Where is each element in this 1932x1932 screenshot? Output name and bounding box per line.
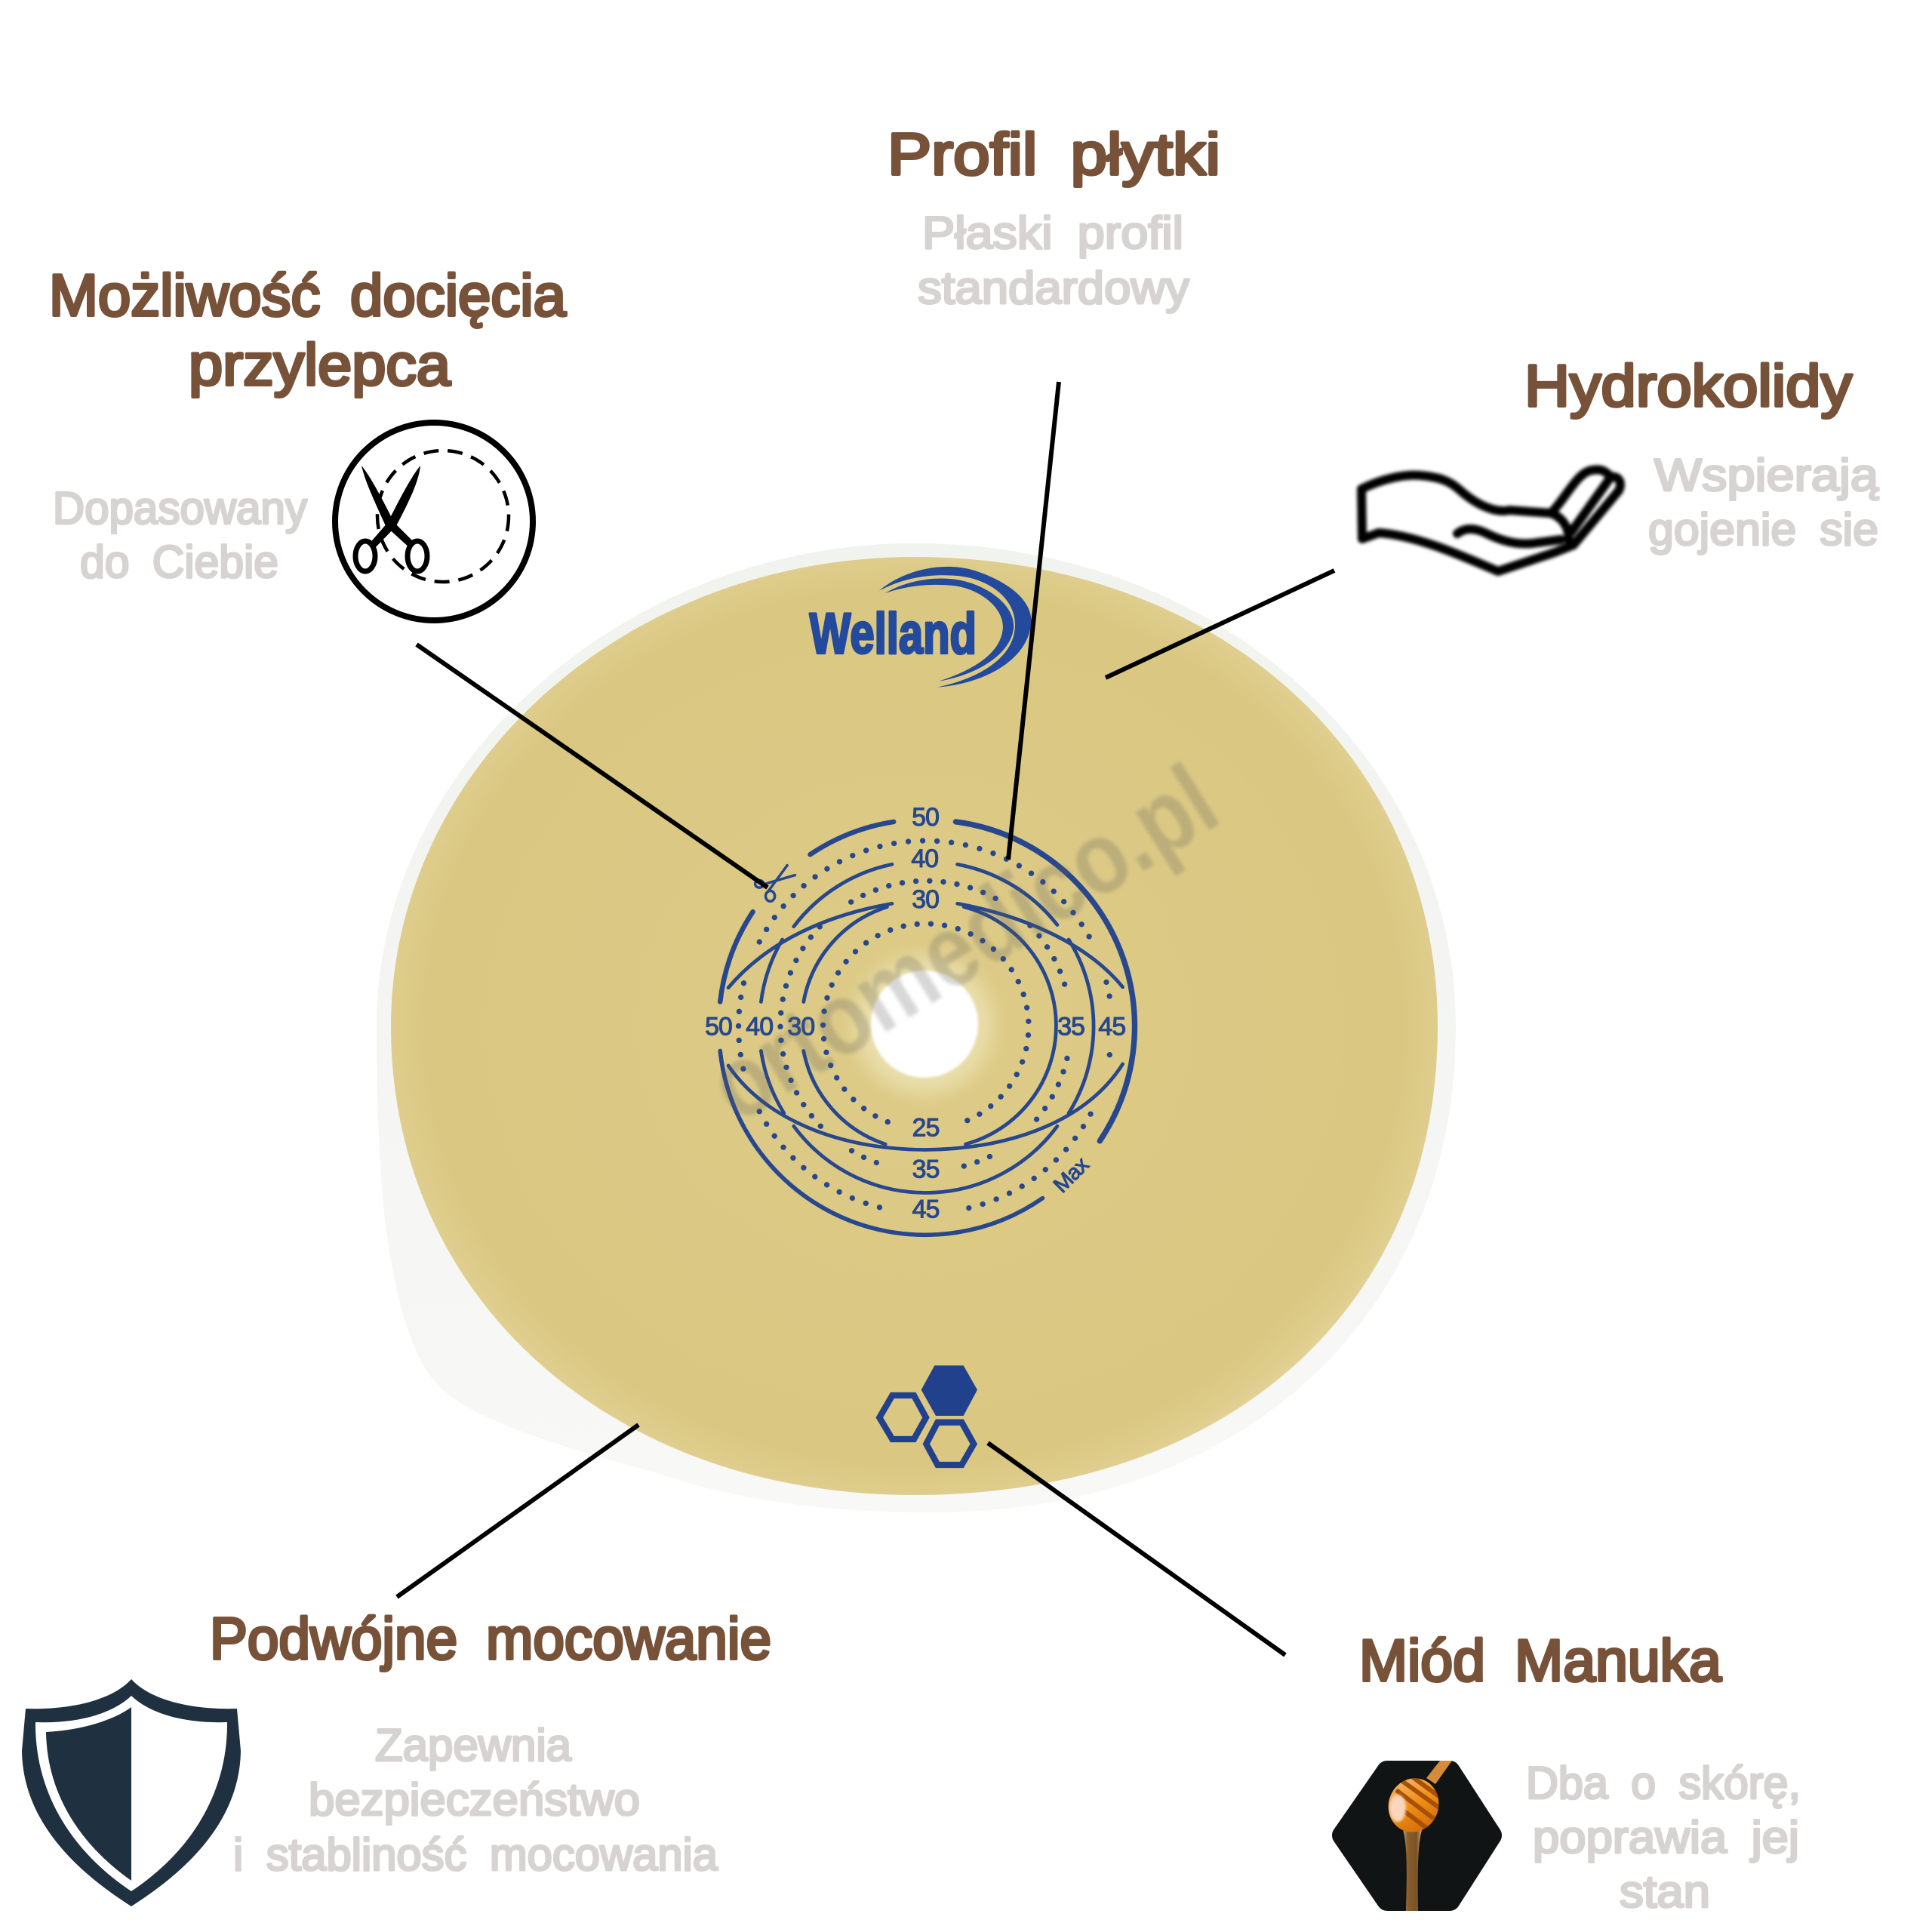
mini scissors mark — [755, 866, 795, 901]
description — [53, 483, 307, 587]
description: Dba o skórę, — [1526, 1758, 1801, 1808]
callout: Hydrokolidy — [1361, 352, 1879, 571]
size numbers: 35 — [1057, 1013, 1084, 1041]
description: Płaski profil — [922, 208, 1183, 258]
description — [1648, 450, 1879, 555]
center hole — [871, 971, 978, 1078]
heading — [49, 262, 567, 398]
description: Zapewnia — [375, 1720, 572, 1770]
description — [918, 208, 1189, 313]
callout lines — [397, 382, 1334, 1655]
size numbers — [705, 803, 1125, 1224]
icon: honey dipper hexagon — [1343, 1761, 1491, 1911]
icon: shield — [22, 1679, 241, 1906]
heading: Profil płytki — [888, 121, 1220, 187]
description: i stabliność mocowania — [233, 1829, 718, 1880]
size numbers: 40 — [911, 844, 938, 873]
size numbers: 40 — [746, 1013, 773, 1041]
size numbers: 35 — [912, 1155, 940, 1183]
dotted rings — [739, 841, 1109, 1208]
description — [233, 1720, 718, 1880]
Welland logo — [810, 567, 1032, 688]
description — [1526, 1758, 1801, 1917]
description: Wspierają — [1654, 450, 1879, 500]
size numbers: 30 — [912, 885, 939, 914]
size numbers: 50 — [705, 1013, 732, 1041]
size numbers: Max — [1049, 1153, 1094, 1198]
size numbers: 45 — [1098, 1013, 1125, 1041]
watermark: ortomedico.pl — [689, 743, 1236, 1143]
callout: Profil płytki — [888, 121, 1220, 313]
heading: Podwójne mocowanie — [210, 1605, 771, 1672]
icon: open hand — [1361, 469, 1620, 571]
description: bezpieczeństwo — [309, 1774, 640, 1825]
heading: Hydrokolidy — [1524, 352, 1852, 419]
description: Dopasowany — [53, 483, 307, 534]
icon: scissors in circle — [335, 423, 533, 620]
callout: Miód Manuka — [1343, 1627, 1801, 1917]
plate backing film — [377, 543, 1456, 1512]
size numbers: 50 — [912, 803, 939, 832]
description: standardowy — [918, 263, 1189, 313]
heading: przylepca — [189, 331, 451, 398]
cut arcs — [720, 822, 1135, 1235]
description: do Ciebie — [80, 537, 278, 587]
size numbers: 45 — [912, 1195, 940, 1224]
size numbers: 25 — [912, 1113, 940, 1142]
measuring guide — [705, 803, 1135, 1235]
hydrocolloid disc — [391, 557, 1438, 1495]
product: Welland adhesive plate — [377, 543, 1456, 1512]
description: stan — [1620, 1866, 1710, 1917]
description: gojenie sie — [1648, 504, 1878, 555]
size numbers: 30 — [787, 1013, 814, 1041]
heading: Możliwość docięcia — [49, 262, 567, 328]
callout: Podwójne mocowanie — [22, 1605, 771, 1906]
honeycomb mark — [879, 1365, 977, 1465]
description: poprawia jej — [1533, 1812, 1799, 1863]
heading: Miód Manuka — [1359, 1627, 1722, 1694]
hole glow — [855, 955, 994, 1094]
Welland logo: Welland — [810, 601, 977, 666]
callout: Możliwość docięcia przylepca — [49, 262, 567, 620]
